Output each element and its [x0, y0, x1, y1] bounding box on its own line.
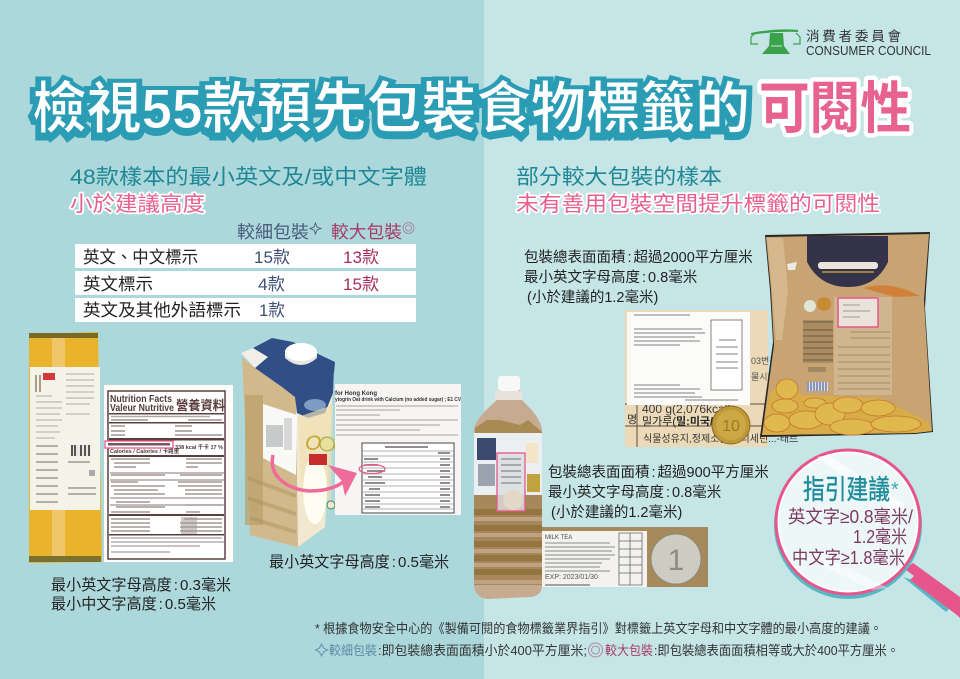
caption: milk tea bottle: 最小英文字母高度:0.8毫米	[548, 483, 721, 501]
table: sample counts: 較細包裝	[237, 222, 309, 242]
footnote: package size definitions: :即包裝總表面面積相等或大於400平方厘米。	[654, 643, 899, 658]
table: sample counts: 4款	[258, 275, 285, 294]
magnifier: guideline recommendation: 英文字≥0.8毫米/	[788, 507, 913, 527]
heading: left: 小於建議高度	[70, 193, 205, 216]
photo: bag label crop with coin: 식물성유지,정제소금,글리세린...-태르	[643, 433, 798, 445]
photo: carton label crop: for Hong Kong	[335, 391, 377, 397]
magnifier: guideline recommendation	[774, 450, 960, 618]
footnote: package size definitions	[316, 643, 899, 658]
photo: nutrition label with highlight: Calories / Calories / 卡路里	[110, 447, 180, 455]
photo: noodle pack	[29, 332, 102, 563]
photo: milk tea label crop with coin	[542, 527, 708, 587]
footnote: package size definitions: :即包裝總表面面積小於400平方厘米;	[378, 643, 587, 658]
photo: milk tea label crop with coin: MILK TEA	[545, 535, 572, 541]
heading: left	[70, 166, 427, 216]
caption: snack bag: 包裝總表面面積:超過2000平方厘米	[524, 249, 753, 266]
caption: milk tea bottle	[548, 464, 769, 521]
photo: bag label crop with coin: 03변경	[751, 355, 778, 366]
title: 檢視55款預先包裝食物標籤的	[32, 77, 750, 140]
photo: nutrition label with highlight	[104, 385, 233, 562]
caption: noodle pack: 最小英文字母高度:0.3毫米	[51, 576, 231, 594]
photo: nutrition label with highlight: Valeur Nutritive	[110, 403, 174, 414]
photo: bag label crop with coin: 물시행	[751, 371, 776, 382]
table: sample counts: 較大包裝	[331, 222, 402, 242]
heading: right	[516, 166, 880, 216]
caption: noodle pack: 最小中文字高度:0.5毫米	[51, 595, 216, 613]
footnote: package size definitions: 較細包裝	[329, 643, 377, 658]
table: sample counts	[75, 222, 416, 322]
photo: nutrition label with highlight: Nutrition Facts	[110, 394, 172, 405]
footnote: guideline source: * 根據食物安全中心的《製備可閱的食物標籤業界指引》對標籤上英文字母和中文字體的最小高度的建議。	[315, 621, 882, 636]
logo: Consumer Council: 消費者委員會	[806, 29, 902, 44]
magnifier: guideline recommendation: 中文字≥1.8毫米	[792, 548, 905, 568]
photo: large snack bag	[760, 232, 933, 437]
photo: bag label crop with coin: 400 g(2,076kcal)	[642, 402, 731, 416]
photo: oat drink carton: Oat	[305, 432, 340, 455]
magnifier: guideline recommendation: *	[891, 479, 899, 501]
photo: milk tea label crop with coin: 1	[668, 544, 684, 577]
caption: snack bag: 最小英文字母高度:0.8毫米	[524, 268, 697, 286]
caption: snack bag	[524, 249, 753, 306]
photo: carton label crop: ytogrin Oat drink with Calcium (no added sugar) ; E1 CV	[335, 397, 461, 403]
table: sample counts: 英文、中文標示	[83, 248, 198, 267]
photo: bag label crop with coin	[625, 310, 798, 447]
photo: oat drink carton	[241, 338, 340, 547]
photo: bag label crop with coin: 밀가루(밀:미국/캐나다	[642, 414, 743, 428]
title: 檢視55款預先包裝食物標籤的	[32, 79, 750, 142]
table: sample counts: 1款	[259, 301, 285, 320]
heading: right: 部分較大包裝的樣本	[516, 166, 722, 189]
caption: carton: 最小英文字母高度:0.5毫米	[269, 553, 449, 571]
title: 可閱性	[759, 77, 911, 140]
photo: milk tea label crop with coin: EXP: 2023/01/30	[545, 574, 598, 581]
logo: Consumer Council	[751, 29, 931, 58]
magnifier: guideline recommendation: 1.2毫米	[853, 527, 907, 547]
heading: right: 未有善用包裝空間提升標籤的可閱性	[516, 193, 880, 216]
table: sample counts: 15款	[254, 248, 290, 267]
caption: milk tea bottle: (小於建議的1.2毫米)	[551, 503, 682, 521]
photo: milk tea bottle	[474, 376, 542, 599]
table: sample counts: 英文標示	[83, 275, 153, 294]
table: sample counts: 13款	[343, 248, 379, 267]
table: sample counts: 15款	[343, 275, 379, 294]
heading: left: 48款樣本的最小英文及/或中文字體	[70, 166, 427, 189]
magnifier: guideline recommendation: 指引建議	[803, 475, 890, 505]
photo: nutrition label with highlight: 營養資料	[176, 398, 225, 413]
photo: bag label crop with coin: 명	[627, 413, 637, 426]
table: sample counts: 英文及其他外語標示	[83, 301, 241, 320]
photo: bag label crop with coin: 10	[722, 418, 740, 435]
photo: nutrition label with highlight: 338 kcal 千卡 17 %	[175, 443, 223, 451]
caption: milk tea bottle: 包裝總表面面積:超過900平方厘米	[548, 464, 769, 481]
arrow: carton to label	[272, 455, 357, 496]
logo: Consumer Council: CONSUMER COUNCIL	[806, 43, 931, 58]
photo: carton label crop	[335, 384, 461, 515]
caption: snack bag: (小於建議的1.2毫米)	[527, 288, 658, 306]
caption: noodle pack	[51, 576, 231, 613]
footnote: package size definitions: 較大包裝	[605, 643, 653, 658]
